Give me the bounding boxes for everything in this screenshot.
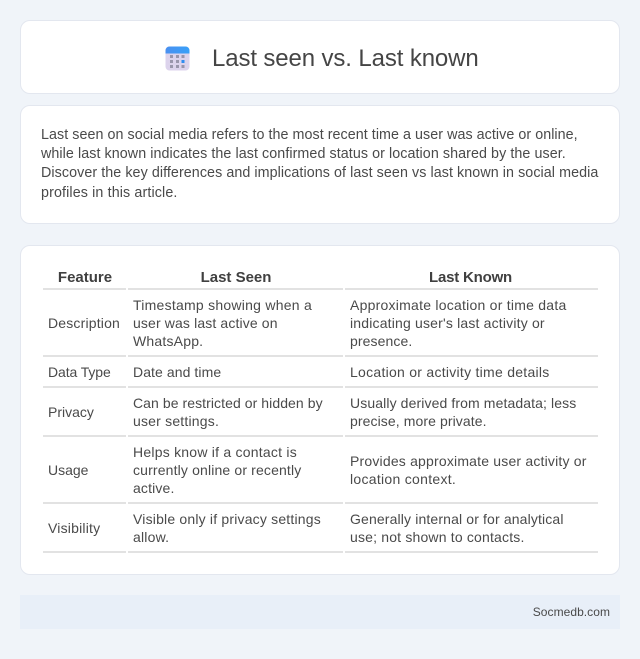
- row: privacy: Can be restricted or hidden by: [133, 395, 323, 411]
- row: usage: currently online or recently: [133, 462, 301, 478]
- row: data type: Data Type: [48, 364, 111, 380]
- row: visibility: Visible only if privacy settings: [133, 511, 321, 527]
- row: usage: active.: [133, 480, 175, 496]
- table header: Feature: [58, 269, 112, 286]
- row: privacy: Usually derived from metadata; less: [350, 395, 576, 411]
- table: [43, 269, 598, 553]
- row: description: Timestamp showing when a: [133, 297, 312, 313]
- row: description: [48, 297, 566, 349]
- table header: Last Seen: [201, 269, 271, 286]
- row: description: Description: [48, 315, 120, 331]
- row: data type: Date and time: [133, 364, 221, 380]
- header card: [20, 20, 620, 94]
- row: usage: [48, 444, 587, 496]
- row: usage: Usage: [48, 462, 88, 478]
- table card: [20, 245, 620, 575]
- row: data type: Location or activity time details: [350, 364, 550, 380]
- intro text: [41, 127, 598, 201]
- row: description: presence.: [350, 333, 412, 349]
- row: privacy: Privacy: [48, 404, 94, 420]
- row: usage: Provides approximate user activity or: [350, 453, 587, 469]
- footer bar: [20, 595, 620, 629]
- intro text: Discover the key differences and implications of last seen vs last known in social media: [41, 165, 598, 181]
- row: description: user was last active on: [133, 315, 278, 331]
- row: visibility: Visibility: [48, 520, 100, 536]
- row: description: indicating user's last activity or: [350, 315, 545, 331]
- row: visibility: use; not shown to contacts.: [350, 529, 525, 545]
- intro text: Last seen on social media refers to the most recent time a user was active or online,: [41, 127, 578, 143]
- row: privacy: user settings.: [133, 413, 219, 429]
- row: data type: [48, 364, 550, 380]
- intro text: while last known indicates the last confirmed status or location shared by the user.: [41, 146, 566, 162]
- title: Last seen vs. Last known: [212, 45, 479, 72]
- footer text: Socmedb.com: [533, 605, 610, 619]
- icon: calendar: [166, 46, 190, 70]
- row: usage: location context.: [350, 471, 456, 487]
- intro card: [20, 105, 620, 224]
- row: visibility: allow.: [133, 529, 169, 545]
- row: visibility: [48, 511, 564, 545]
- intro text: profiles in this article.: [41, 185, 178, 201]
- row: privacy: precise, more private.: [350, 413, 487, 429]
- row: visibility: Generally internal or for analytical: [350, 511, 564, 527]
- row: usage: Helps know if a contact is: [133, 444, 297, 460]
- row: description: Approximate location or time data: [350, 297, 566, 313]
- table header: Last Known: [429, 269, 512, 286]
- row: privacy: [48, 395, 576, 429]
- row: description: WhatsApp.: [133, 333, 203, 349]
- table header: [58, 269, 512, 286]
